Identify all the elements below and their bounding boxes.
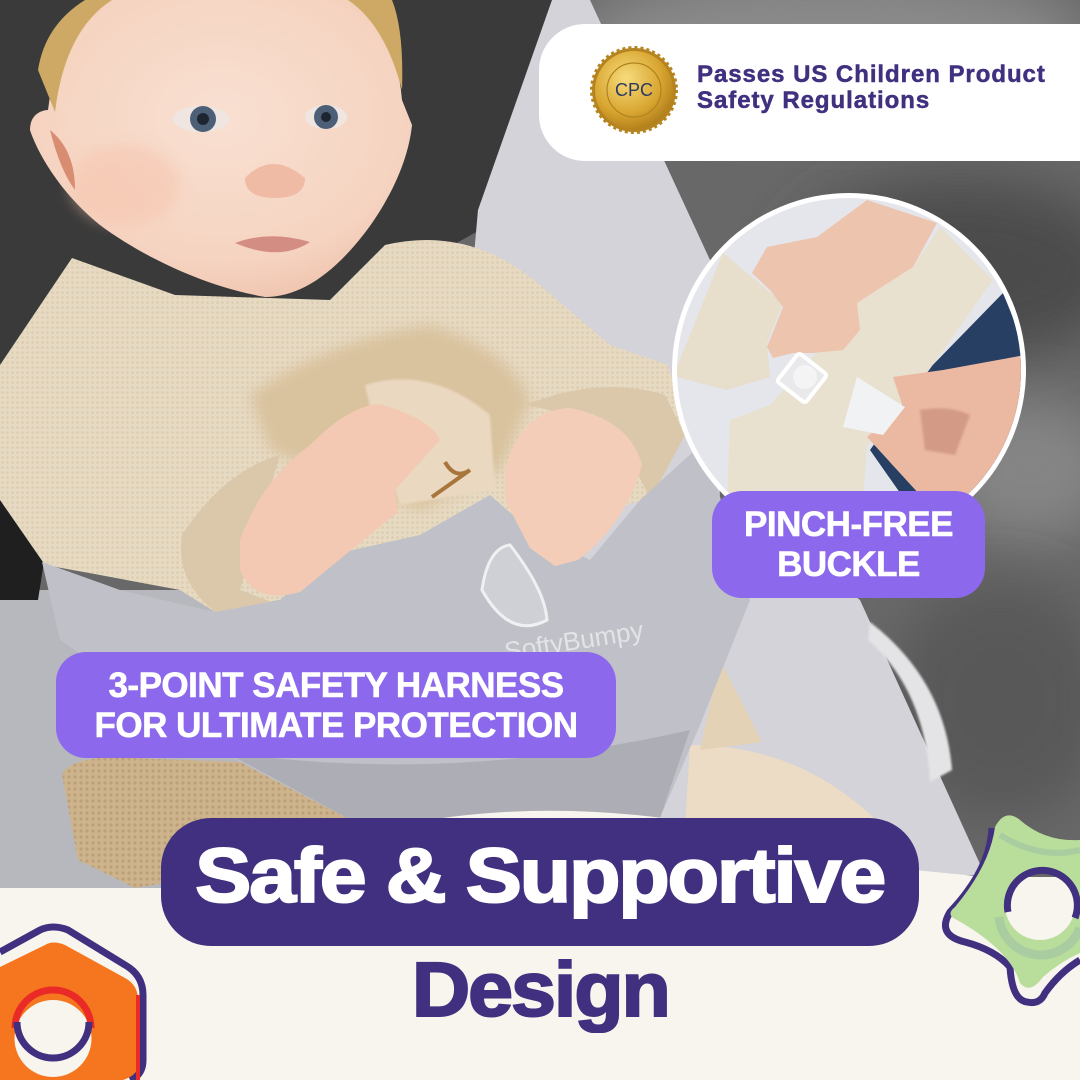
certification text: Safety Regulations (697, 86, 930, 114)
label: 3-point safety harness: FOR ULTIMATE PROTECTION (94, 706, 578, 744)
baby hands (240, 404, 642, 596)
baby legs (62, 660, 878, 888)
baby sweater (0, 240, 685, 612)
label: 3-point safety harness: 3-POINT SAFETY HARNESS (108, 666, 564, 704)
strap clip: black (0, 500, 45, 600)
title: design: Design (412, 947, 668, 1033)
seat: light grey fabric wing (470, 0, 985, 880)
baby head (30, 0, 412, 297)
seat: white side clip (868, 622, 952, 782)
toy: green star (945, 815, 1080, 1003)
buckle parts (777, 353, 827, 403)
icon: CPC gold seal (590, 46, 678, 134)
certification banner (539, 24, 1080, 161)
title: safe and supportive (161, 818, 919, 946)
logo on harness (482, 545, 645, 667)
label: pinch-free buckle: PINCH-FREE (744, 504, 953, 544)
seat: grey lower fabric (0, 590, 240, 888)
cream bottom wave (0, 811, 1080, 1080)
inset photo: buckle close-up (672, 193, 1026, 496)
logo on harness: SoftyBumpy (502, 615, 645, 667)
headband (38, 0, 112, 112)
certification text: Passes US Children Product (697, 61, 1046, 88)
toy: orange hexagon (0, 927, 143, 1080)
label: pinch-free buckle: BUCKLE (777, 544, 920, 584)
harness: grey safety pad (42, 450, 750, 825)
certification text (697, 61, 1046, 114)
label: 3-point safety harness (56, 652, 616, 758)
seat: dark headrest (0, 0, 590, 380)
icon: CPC gold seal: CPC (615, 80, 653, 100)
title: safe and supportive: Safe & Supportive (196, 832, 884, 918)
label: pinch-free buckle (712, 491, 985, 598)
